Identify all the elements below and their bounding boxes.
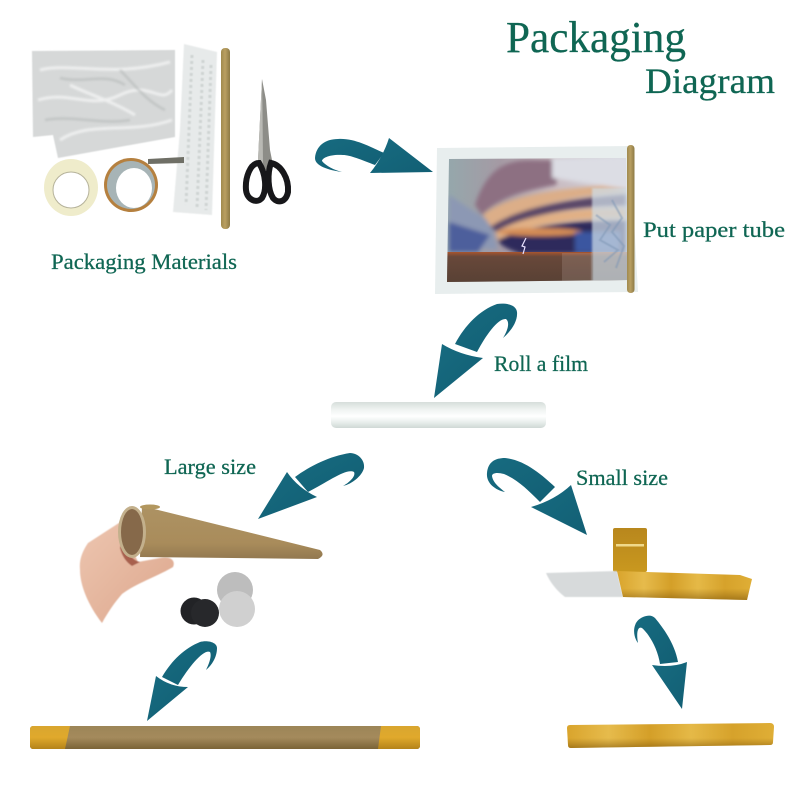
title: Diagram xyxy=(645,61,775,101)
yellow taped part xyxy=(617,571,752,600)
tape roll xyxy=(613,528,647,572)
finished small tube xyxy=(567,723,774,748)
masking tape xyxy=(44,159,98,216)
scissors xyxy=(246,79,288,201)
label: small size: Small size xyxy=(576,465,668,490)
title xyxy=(506,13,775,101)
cone tube xyxy=(140,506,323,559)
white film roll xyxy=(331,402,546,428)
bubble wrap xyxy=(173,44,217,215)
panel: packaging materials xyxy=(32,44,288,229)
poster with paper tube xyxy=(435,145,638,294)
arrow: small tube to final xyxy=(634,616,687,709)
title: Packaging xyxy=(506,13,686,62)
tube end caps xyxy=(180,572,255,627)
small tube with tape xyxy=(546,528,752,600)
plastic sheet xyxy=(32,50,175,158)
label: put paper tube: Put paper tube xyxy=(643,217,785,242)
clear tape xyxy=(104,158,158,212)
hand xyxy=(80,521,174,623)
dark strip xyxy=(148,157,184,164)
arrow: poster to roll xyxy=(434,304,517,398)
poster paper xyxy=(435,146,638,294)
arrow: roll to small tube xyxy=(487,458,587,535)
label: packaging materials: Packaging Materials xyxy=(51,249,237,274)
label: large size: Large size xyxy=(164,454,256,479)
poster photo: storm xyxy=(445,155,630,285)
bubble wrapped part xyxy=(546,571,623,597)
paper tube xyxy=(221,48,230,229)
arrow: roll to large tube xyxy=(258,453,364,519)
arrow: large tube to final xyxy=(147,641,217,721)
hand holding cone tube xyxy=(80,504,323,623)
paper tube on poster xyxy=(627,145,634,293)
label: roll a film: Roll a film xyxy=(494,351,588,376)
finished large tube xyxy=(30,726,420,749)
arrow: materials to poster xyxy=(315,138,433,173)
